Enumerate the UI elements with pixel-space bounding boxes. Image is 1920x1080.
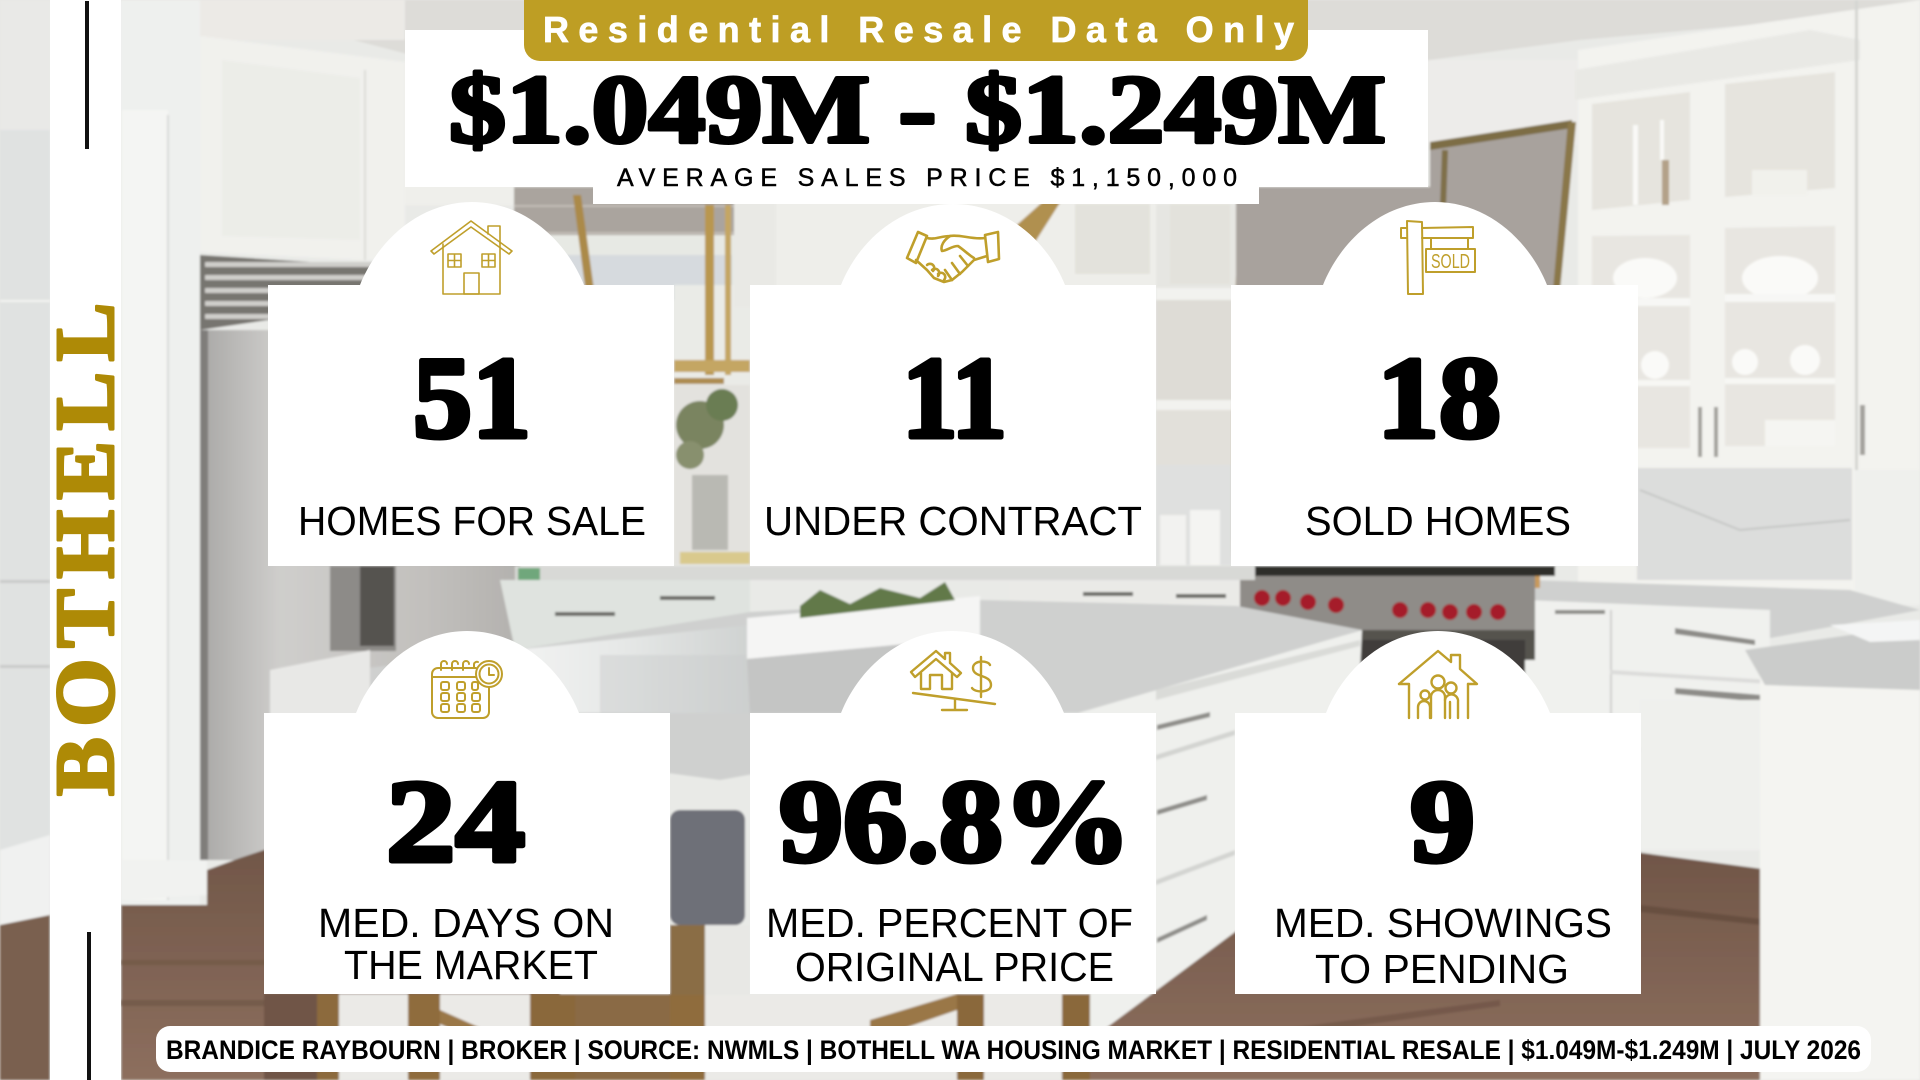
icon: house and dollar on scale: [911, 651, 995, 710]
icon: sold sign: SOLD: [1431, 251, 1470, 273]
icon: house: [431, 221, 512, 294]
stat: 96.8%: 96.8%: [779, 756, 1131, 887]
label: THE MARKET: [344, 942, 598, 988]
label: MED. PERCENT OF: [766, 900, 1133, 946]
badge: data scope: Residential Resale Data Only: [543, 9, 1294, 50]
header panel: [405, 0, 1428, 204]
label: MED. DAYS ON: [318, 900, 614, 946]
stat: 18: 18: [1377, 334, 1501, 463]
average sales price: AVERAGE SALES PRICE $1,150,000: [617, 164, 1237, 192]
label: SOLD HOMES: [1305, 498, 1571, 544]
label: [766, 900, 1133, 990]
footer source bar: [156, 1026, 1871, 1072]
stat: 9: 9: [1410, 756, 1475, 887]
icon: family in house: [1399, 651, 1477, 718]
label: ORIGINAL PRICE: [795, 944, 1114, 990]
city name: BOTHELL: [38, 303, 132, 796]
card: median showings to pending: [1235, 631, 1641, 994]
card: median days on market: [264, 631, 670, 994]
vertical white strip: [38, 0, 132, 1080]
stat: 24: 24: [386, 756, 525, 887]
card: homes for sale: [268, 202, 674, 566]
label: TO PENDING: [1315, 946, 1569, 992]
icon: handshake: [907, 232, 999, 282]
bottom black line: [87, 932, 91, 1080]
label: HOMES FOR SALE: [298, 498, 646, 544]
card: under contract: [750, 204, 1156, 566]
card: sold homes: [1231, 202, 1638, 566]
badge: data scope: [524, 0, 1308, 61]
card: median percent of original price: [750, 631, 1156, 994]
top black line: [85, 1, 89, 149]
price range heading: $1.049M - $1.249M: [449, 56, 1386, 164]
icon: sold sign: [1401, 221, 1475, 294]
label: [1274, 900, 1612, 992]
label: UNDER CONTRACT: [764, 498, 1142, 544]
icon: calendar with clock: [432, 661, 502, 718]
stat: 11: 11: [902, 334, 1007, 463]
label: [318, 900, 614, 988]
label: MED. SHOWINGS: [1274, 900, 1612, 946]
stat: 51: 51: [413, 334, 531, 463]
